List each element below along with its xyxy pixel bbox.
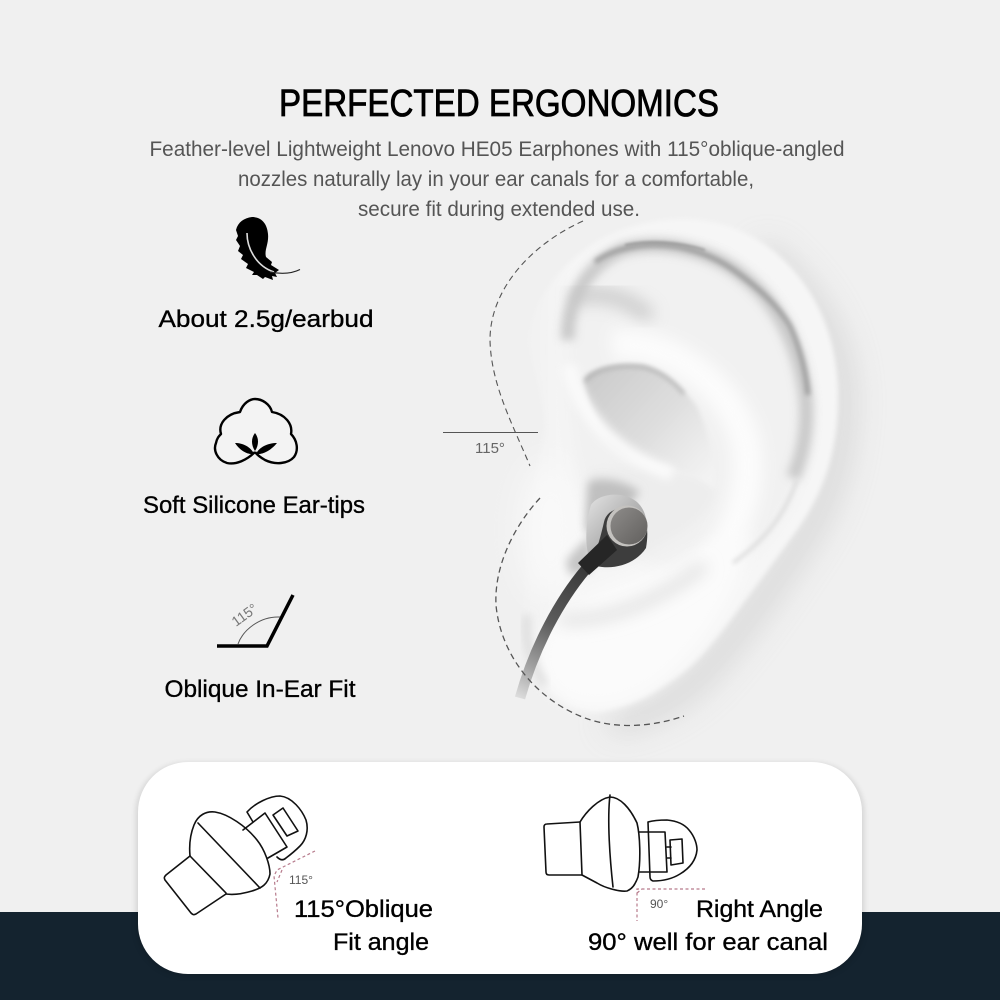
text: 115 oblique: 115°Oblique — [294, 896, 433, 923]
angle guide 115 — [274, 851, 315, 918]
ear body — [524, 219, 838, 712]
tragus shadow — [566, 535, 592, 575]
text: right angle: Right Angle — [696, 896, 823, 923]
label 90 small: 90° — [650, 897, 668, 911]
115 degree line — [443, 432, 538, 434]
intro text block: Feather-level Lightweight Lenovo HE05 Earphones with 115°oblique-angled — [150, 138, 844, 161]
feature: oblique fit — [164, 595, 356, 703]
text: 90 well for ear canal: 90° well for ear canal — [588, 929, 828, 956]
panel background — [138, 762, 862, 974]
feature: silicone — [143, 399, 365, 519]
115 degree label: 115° — [475, 440, 505, 457]
intro text block: secure fit during extended use. — [358, 198, 640, 221]
dark body — [592, 507, 647, 567]
cable — [520, 569, 586, 698]
icon: cotton — [215, 399, 297, 463]
scapha hollow — [565, 243, 810, 590]
diagram: 115 degree ear-tip — [164, 796, 307, 915]
earphone in the ear — [520, 495, 648, 698]
angle guide 90 — [637, 889, 705, 921]
lower helix fold line — [733, 480, 797, 563]
label: oblique fit: Oblique In-Ear Fit — [164, 676, 356, 703]
antihelix soft shadow — [572, 295, 650, 318]
silver earbud housing — [586, 495, 646, 560]
label 115 small: 115° — [289, 873, 313, 887]
lobe highlight — [538, 530, 750, 706]
concha rim shadow — [585, 366, 684, 394]
helix fold dark line — [625, 242, 705, 250]
lower concha fold shadow — [560, 565, 705, 620]
intro text block — [150, 138, 844, 221]
helix fold shadow — [595, 245, 808, 395]
diagram: 90 degree ear-tip — [544, 795, 697, 891]
intro text block: nozzles naturally lay in your ear canals for a comfortable, — [238, 168, 754, 191]
dashed arc upper — [490, 221, 583, 466]
dashed arc lower — [496, 498, 684, 725]
feature: weight — [158, 217, 374, 333]
icon: angle — [217, 595, 293, 646]
text: fit angle: Fit angle — [333, 929, 429, 956]
ear illustration — [520, 219, 842, 722]
tragus glow — [520, 460, 580, 600]
title: PERFECTED ERGONOMICS — [279, 83, 719, 125]
lobe crease shadow — [526, 615, 545, 685]
helix wide soft shadow — [568, 246, 806, 478]
upper concha hollow — [582, 364, 715, 490]
antihelix highlight — [612, 345, 748, 575]
crus highlight — [569, 365, 672, 474]
panel: ear-tip angle comparison — [136, 762, 864, 976]
dark footer band — [0, 912, 1000, 1000]
metal disc face — [610, 508, 648, 544]
icon: angle: 115° — [228, 600, 260, 629]
ear drop shadow — [610, 250, 842, 722]
label: silicone: Soft Silicone Ear-tips — [143, 492, 365, 519]
icon: feather — [236, 217, 300, 280]
lower concha — [590, 468, 715, 566]
cable strain relief — [578, 535, 617, 575]
ear canal shadow — [585, 479, 640, 540]
panel shadow — [136, 763, 864, 976]
label: weight: About 2.5g/earbud — [158, 306, 374, 333]
metal disc rim — [606, 506, 648, 546]
